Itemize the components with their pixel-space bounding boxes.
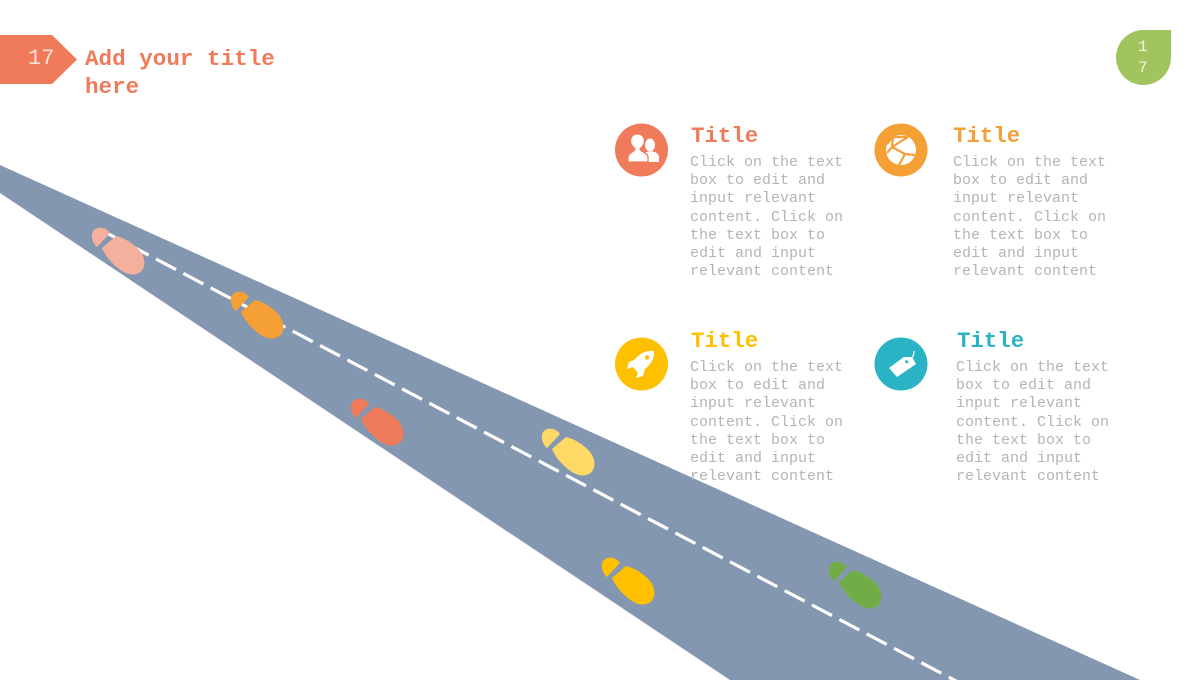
icon: rocket: [615, 338, 668, 390]
block 4 text: Click on the text box to edit and input relevant content. Click on the text box to edit and input relevant content: [956, 359, 1109, 485]
icon: globe: [874, 124, 928, 176]
page number: [1138, 38, 1148, 76]
block 3 title: Title: [691, 328, 758, 354]
footprint: yellow: [602, 558, 654, 604]
slide title: here: [85, 74, 139, 100]
page number leaf: [1116, 30, 1171, 85]
footprint: orange: [231, 292, 283, 338]
footprint: pink: [92, 228, 144, 274]
footprint: green: [829, 562, 881, 608]
block 2 text: Click on the text box to edit and input relevant content. Click on the text box to edit and input relevant content: [953, 154, 1106, 280]
slide number arrow tag: [0, 35, 77, 84]
page number: 7: [1138, 58, 1148, 76]
icon: people: [615, 124, 668, 176]
icon: price tag: [874, 338, 928, 390]
slide number: 17: [28, 46, 54, 71]
block 1 text: Click on the text box to edit and input relevant content. Click on the text box to edit and input relevant content: [690, 154, 843, 280]
dashed centre line: [101, 230, 957, 680]
block 4 title: Title: [957, 328, 1024, 354]
road: [0, 165, 1140, 680]
slide title: [85, 46, 275, 100]
block 2 title: Title: [953, 123, 1020, 149]
footprint: coral: [351, 399, 403, 445]
footprint: light yellow: [542, 429, 594, 475]
page number: 1: [1138, 38, 1148, 56]
slide title: Add your title: [85, 46, 275, 72]
block 1 title: Title: [691, 123, 758, 149]
block 3 text: Click on the text box to edit and input relevant content. Click on the text box to edit and input relevant content: [690, 359, 843, 485]
